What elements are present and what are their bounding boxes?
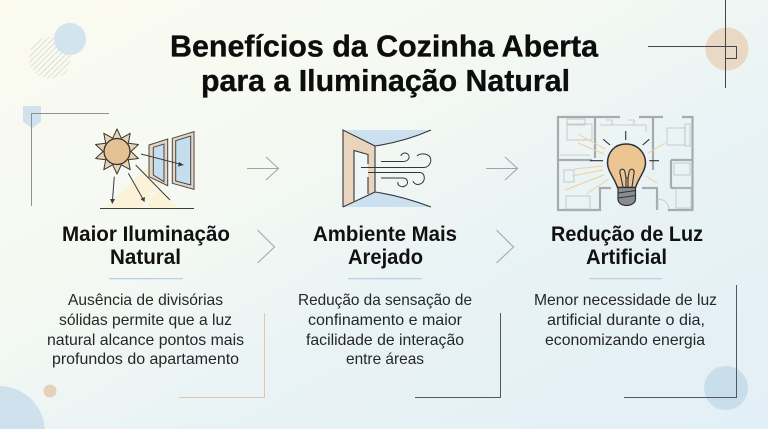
decorative hatched circle	[29, 37, 71, 79]
column 3: Redução de Luz Artificial	[534, 223, 717, 349]
title	[170, 28, 599, 98]
body text: profundos do apartamento	[52, 351, 239, 368]
decorative tan dot	[44, 384, 56, 398]
window panes	[153, 136, 191, 185]
divider	[348, 278, 422, 279]
body text: sólidas permite que a luz	[59, 312, 232, 329]
divider	[109, 278, 183, 279]
decorative blue circle, bottom right	[704, 366, 748, 410]
body text: confinamento e maior	[308, 312, 463, 329]
sun rays	[96, 129, 138, 174]
divider	[589, 278, 662, 279]
corner bracket, column 1	[179, 313, 264, 398]
body text	[298, 292, 472, 368]
corner bracket, column 3	[624, 285, 736, 398]
decorative lines, top right	[648, 0, 736, 88]
body text: economizando energia	[545, 332, 705, 349]
tan wall	[343, 130, 375, 207]
body text: entre áreas	[346, 351, 424, 368]
body text: artificial durante o dia,	[547, 312, 705, 329]
chevron 1	[258, 230, 274, 263]
column 3: Redução de Luz Artificial: Artificial	[586, 246, 667, 269]
heading: Redução de Luz	[551, 223, 703, 246]
body text: Ausência de divisórias	[68, 292, 223, 309]
decorative tan circle, top right	[706, 28, 748, 70]
column 2: Ambiente Mais Arejado: Arejado	[348, 246, 423, 269]
floor plan walls	[558, 117, 692, 210]
icon: sun and window	[96, 129, 194, 208]
body text	[47, 292, 244, 368]
room outline	[343, 130, 431, 207]
body text: Menor necessidade de luz	[534, 292, 717, 309]
body text	[534, 292, 717, 349]
body text: natural alcance pontos mais	[47, 332, 244, 349]
decorative blue circle, top left	[54, 23, 86, 55]
icon: floor plan with light bulb	[558, 117, 692, 210]
bulb	[608, 144, 646, 188]
light rays	[565, 134, 665, 194]
title: Benefícios da Cozinha Aberta	[170, 28, 599, 64]
arrow heads	[110, 162, 184, 204]
bulb details	[590, 131, 659, 198]
bulb base	[618, 188, 636, 206]
wind lines	[361, 153, 431, 187]
body text: Redução da sensação de	[298, 292, 472, 309]
door opening	[354, 150, 368, 202]
icon: air flow through room	[343, 130, 431, 207]
blue sky areas	[346, 130, 431, 207]
blue shield accent	[23, 106, 41, 128]
corner bracket, top left	[32, 114, 109, 206]
floor line	[100, 208, 194, 210]
arrow 2	[486, 157, 518, 180]
arrow 1	[247, 157, 278, 180]
floor plan furniture	[560, 119, 691, 209]
heading: Maior Iluminação	[62, 223, 230, 246]
light arrows	[112, 154, 181, 200]
column 1: Maior Iluminação Natural	[47, 223, 244, 368]
heading: Ambiente Mais	[313, 223, 457, 246]
sun disc	[104, 138, 130, 164]
window frames	[149, 132, 194, 189]
decorative blue circle, bottom left	[0, 386, 45, 429]
body text: facilidade de interação	[306, 332, 464, 349]
column 2: Ambiente Mais Arejado	[298, 223, 472, 368]
corner bracket, column 2	[415, 313, 500, 398]
title: para a Iluminação Natural	[201, 63, 570, 98]
column 1: Maior Iluminação Natural: Natural	[110, 246, 181, 269]
light beam	[105, 165, 178, 208]
chevron 2	[496, 230, 514, 263]
